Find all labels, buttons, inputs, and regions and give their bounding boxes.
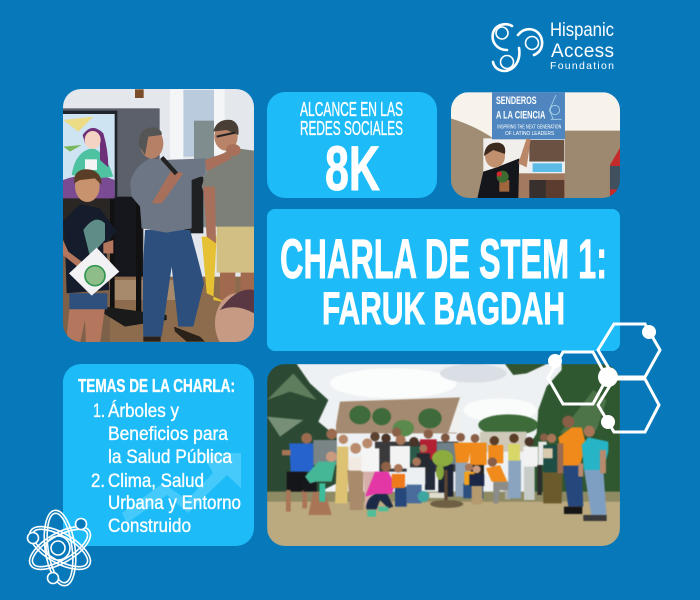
person: red shirt: [420, 429, 437, 490]
photo: boy at Senderos a la Ciencia banner: [451, 92, 621, 199]
photo: speaker with microphone: [63, 89, 258, 353]
logo: Hispanic Access Foundation: [493, 20, 614, 72]
person: orange kneeling: [392, 464, 407, 507]
person: orange 1: [454, 433, 472, 497]
photo: boy at Senderos a la Ciencia banner: SENDEROS: [496, 95, 537, 107]
person: white shirt kneeling: [407, 457, 429, 503]
panel: social media reach: [267, 92, 437, 204]
icon: atom: [23, 508, 97, 588]
logo text: Foundation: [550, 60, 614, 72]
person: grey shirt: [313, 429, 337, 465]
person: yellow shirt: [508, 434, 521, 498]
person: orange woman: [488, 436, 503, 463]
person: white shirt woman: [523, 437, 538, 500]
panel: title: [267, 209, 620, 351]
logo text: [550, 20, 614, 72]
person: child orange: [463, 463, 483, 498]
topics heading: TEMAS DE LA CHARLA:: [78, 375, 235, 396]
photo: group planting a tree: [267, 364, 620, 547]
person: dark kid: [417, 444, 430, 473]
topic 1: [93, 399, 232, 468]
person: olive pants: [543, 434, 563, 503]
topic 1: Árboles y: [108, 399, 179, 422]
sapling: [429, 450, 453, 500]
social reach label: [300, 99, 403, 140]
person: orange crouching: [486, 457, 510, 503]
person: child navy: [469, 465, 484, 504]
foreground head: [215, 293, 254, 342]
topic 2: [91, 470, 241, 537]
topic 1: la Salud Pública: [108, 446, 232, 468]
stat: 8K: 8K: [325, 134, 380, 204]
speaker name: FARUK BAGDAH: [322, 283, 565, 334]
person: white blouse: [361, 438, 379, 507]
person: blue shirt: [282, 433, 313, 512]
topic 2: Urbana y Entorno: [108, 492, 241, 514]
person: white shirt man: [537, 433, 548, 495]
person: orange 2: [470, 434, 487, 483]
social reach label: ALCANCE EN LAS: [300, 99, 403, 121]
panel: talk topics: [63, 364, 254, 546]
boy: [66, 309, 105, 342]
decorative arrow: [122, 453, 241, 523]
topic 1: 1.: [93, 400, 105, 422]
photo: boy at Senderos a la Ciencia banner: A LA CIENCIA: [496, 109, 546, 121]
person: pink shirt kneeling: [365, 462, 395, 517]
photo: boy at Senderos a la Ciencia banner: INSPIRING THE NEXT GENERATION: [497, 124, 561, 130]
topic 1: Beneficios para: [108, 423, 228, 445]
person: cream and yellow dress: [335, 435, 348, 503]
icon: triskelion: [493, 24, 542, 71]
topic 2: Construido: [108, 515, 191, 537]
person: white shirt center: [390, 435, 410, 469]
topic 2: Clima, Salud: [108, 470, 204, 492]
back row: [370, 428, 458, 472]
center man: [143, 230, 204, 337]
right man: [220, 272, 236, 304]
person: teal shirt: [578, 426, 608, 521]
person: tall orange: [557, 416, 586, 514]
person: grey with hat center: [437, 433, 456, 497]
topic 2: 2.: [91, 470, 105, 492]
icon: hexagons: [548, 324, 660, 432]
social reach label: REDES SOCIALES: [300, 118, 403, 140]
photo: boy at Senderos a la Ciencia banner: OF LATINO LEADERS: [505, 131, 554, 137]
person: white top tan pants: [347, 443, 363, 510]
person: teal crouching: [302, 451, 337, 515]
logo text: Access: [551, 41, 614, 62]
logo text: Hispanic: [550, 20, 614, 41]
